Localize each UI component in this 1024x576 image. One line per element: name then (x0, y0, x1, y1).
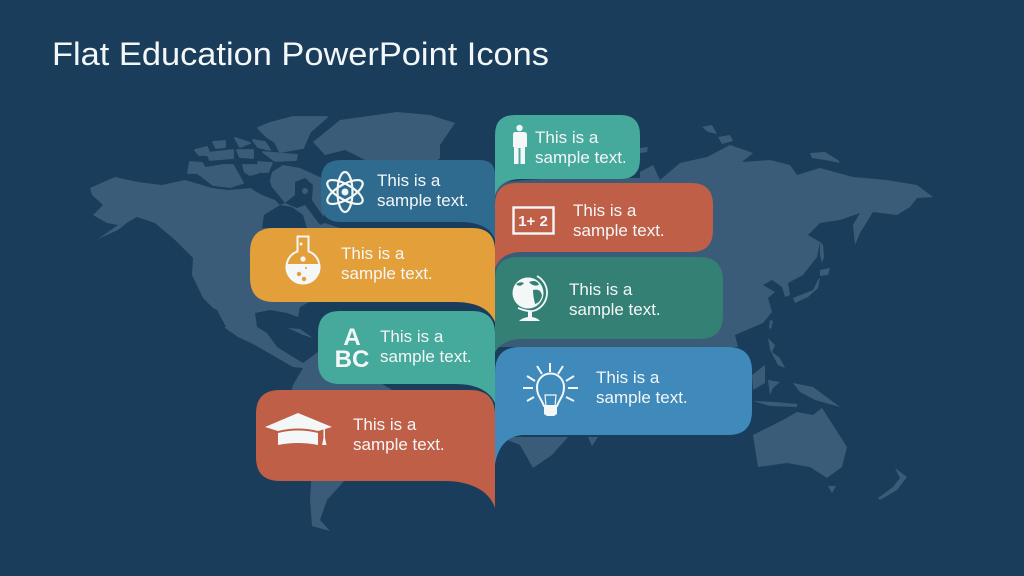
icon: light bulb (523, 363, 578, 416)
icon: atom (324, 172, 366, 212)
bubble: atom (321, 160, 495, 240)
text: flask: sample text. (341, 264, 433, 283)
icon: flask (286, 236, 320, 284)
text: graduation cap: This is a (353, 415, 417, 434)
text: light bulb: sample text. (596, 388, 688, 407)
bubble: globe (495, 257, 723, 352)
icon: ABC letters: A (343, 324, 361, 351)
icon: globe (512, 276, 547, 321)
text: globe: This is a (569, 280, 633, 299)
text: ABC: sample text. (380, 347, 472, 366)
icon: chalkboard 1+2 (514, 208, 554, 234)
text: person: This is a (535, 128, 599, 147)
bubble: light bulb (495, 347, 752, 464)
text: flask: This is a (341, 244, 405, 263)
icon: graduation cap (265, 413, 332, 445)
text: chalkboard: sample text. (573, 221, 665, 240)
text: atom: This is a (377, 171, 441, 190)
text: globe: sample text. (569, 300, 661, 319)
text: person: sample text. (535, 148, 627, 167)
world map background (90, 112, 933, 531)
bubble: person (495, 115, 640, 195)
icon: ABC letters: BC (335, 346, 369, 373)
icon: person (513, 125, 527, 164)
text: atom: sample text. (377, 191, 469, 210)
icon: chalkboard 1+2: 1+ 2 (518, 213, 548, 230)
text: chalkboard: This is a (573, 201, 637, 220)
bubble: chalkboard (495, 183, 713, 268)
bubble: flask (250, 228, 495, 322)
icon: ABC letters (335, 324, 369, 373)
title: Flat Education PowerPoint Icons (52, 36, 549, 72)
bubble: graduation cap (256, 390, 495, 508)
text: ABC: This is a (380, 327, 444, 346)
text: light bulb: This is a (596, 368, 660, 387)
text: graduation cap: sample text. (353, 435, 445, 454)
bubble: ABC (318, 311, 495, 403)
